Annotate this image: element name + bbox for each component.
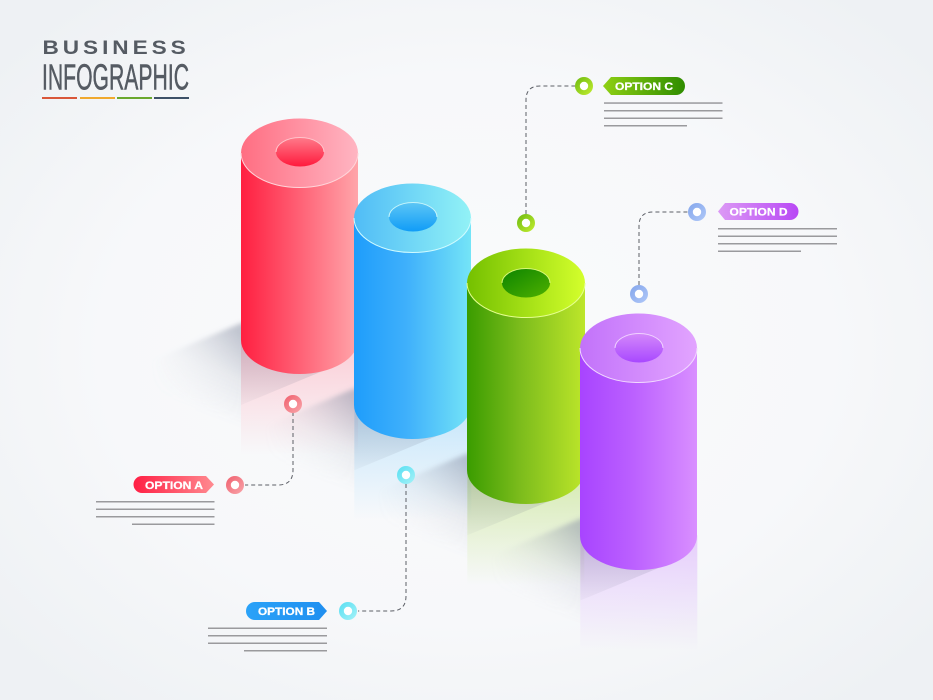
shadows and reflection: option A — [182, 321, 358, 434]
title: Business Infographic: INFOGRAPHIC — [42, 56, 189, 98]
title: Business Infographic — [42, 37, 190, 99]
callout: option B — [208, 466, 415, 652]
callout: option C: OPTION C — [615, 81, 673, 93]
callout: option B: OPTION B — [258, 606, 315, 618]
title: Business Infographic: BUSINESS — [42, 37, 190, 59]
shadows and reflection: option B — [296, 386, 471, 502]
callout: option A: OPTION A — [145, 480, 203, 492]
shadows and reflection: option D — [523, 516, 698, 628]
callout: option D: OPTION D — [730, 206, 788, 218]
cylinder: option D — [580, 314, 697, 570]
cylinder: option C — [467, 248, 585, 504]
callout: option C — [517, 77, 722, 232]
callout: option A — [96, 395, 302, 525]
cylinder: option B — [354, 184, 471, 439]
callout: option D — [630, 203, 837, 303]
shadows and reflection: option C — [410, 452, 584, 573]
cylinder: option A — [241, 118, 358, 374]
infographic canvas — [42, 40, 837, 652]
